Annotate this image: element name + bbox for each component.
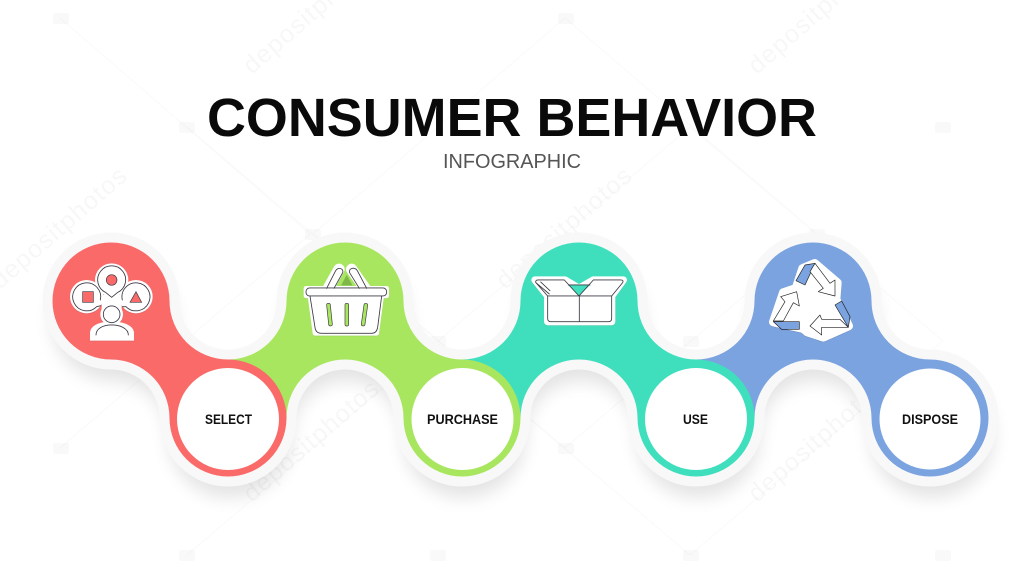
panel: dispose — [696, 243, 989, 477]
label: select: SELECT — [205, 412, 253, 427]
label: use: USE — [683, 412, 708, 427]
label: dispose: DISPOSE — [902, 412, 958, 427]
light halo outline around the chain — [52, 243, 989, 477]
icon: person choosing shapes — [70, 263, 153, 341]
icon: recycle arrows — [773, 263, 850, 337]
panel: purchase — [228, 243, 520, 477]
icon: open box — [535, 280, 623, 322]
label: purchase: PURCHASE — [427, 412, 498, 427]
watermark pattern: depositphotos — [491, 162, 637, 295]
title: CONSUMER BEHAVIOR — [207, 88, 817, 148]
icon: shopping basket — [306, 268, 387, 333]
watermark pattern: depositphotos — [743, 375, 889, 508]
panel: use — [462, 243, 754, 477]
panel: select — [52, 243, 286, 477]
watermark pattern: depositphotos — [238, 375, 384, 508]
subtitle: INFOGRAPHIC — [443, 151, 581, 173]
soft drop shadow under the chain — [54, 260, 991, 495]
